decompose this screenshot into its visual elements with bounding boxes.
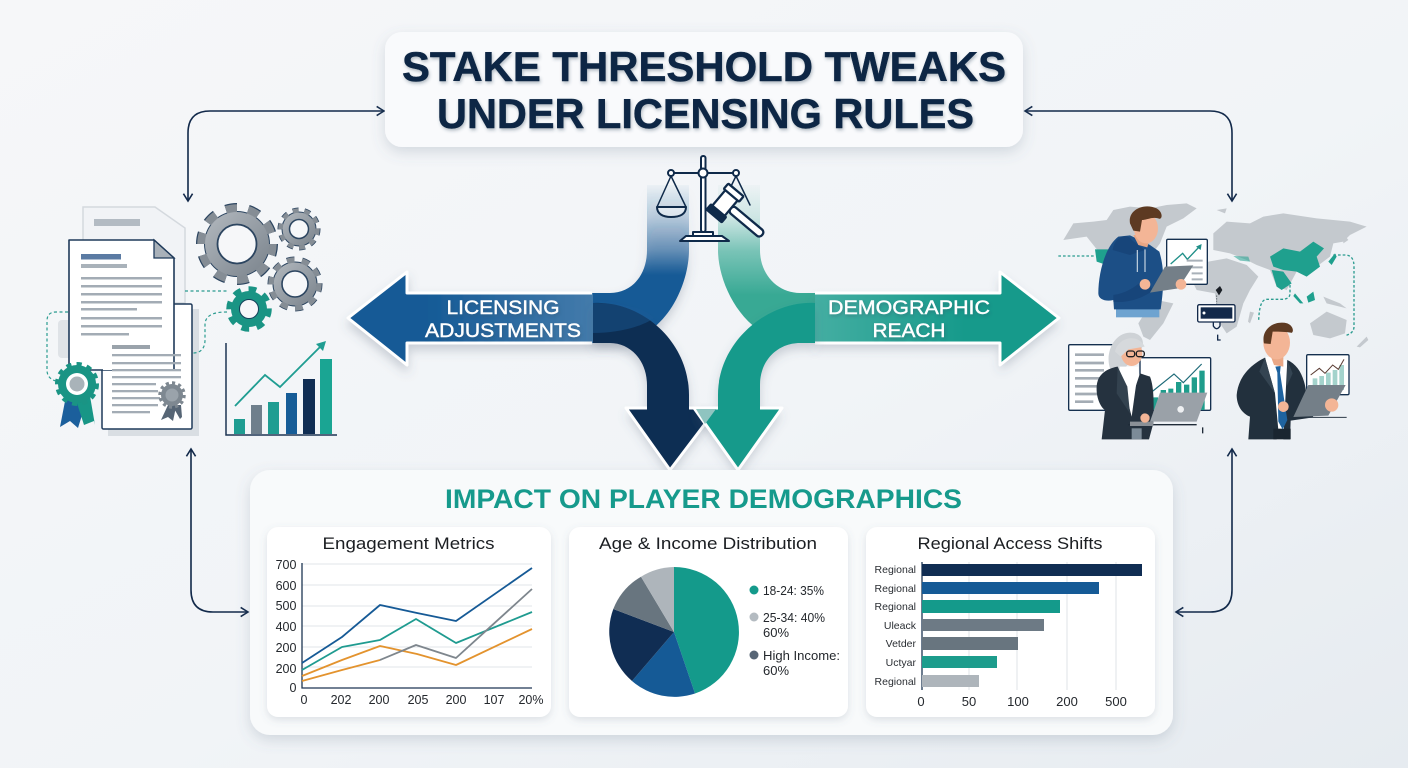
title: STAKE THRESHOLD TWEAKS <box>402 43 1006 90</box>
title panel <box>385 32 1023 147</box>
bar chart: 200 <box>1056 694 1078 709</box>
world map <box>1063 203 1368 347</box>
dashed map connectors <box>1058 255 1354 336</box>
pie chart <box>609 567 739 697</box>
chart title: Age & Income Distribution <box>599 534 817 553</box>
label: licensing adjustments: ADJUSTMENTS <box>425 320 581 342</box>
icon: teal gear <box>229 289 269 329</box>
bar chart: 0 <box>917 694 925 709</box>
legend <box>750 583 840 678</box>
icon: grey seal <box>160 383 184 421</box>
icon: scales of justice with gavel <box>657 156 773 248</box>
icon: side tab <box>58 320 78 358</box>
chart icon: growth bars with trend arrow <box>226 341 337 435</box>
card: engagement metrics line chart <box>267 527 551 717</box>
title: UNDER LICENSING RULES <box>437 90 974 137</box>
illustration: world map and three players <box>1058 203 1368 439</box>
line chart: 400 <box>276 620 296 634</box>
icon: background document <box>83 207 185 303</box>
bar chart: Regional <box>875 676 916 688</box>
heading: IMPACT ON PLAYER DEMOGRAPHICS <box>445 484 962 514</box>
line chart: 20% <box>518 693 544 707</box>
dashed connectors <box>47 291 227 382</box>
legend: 25-34: 40% <box>763 610 825 625</box>
icon: medium gear <box>271 260 319 308</box>
icon: main document <box>69 240 174 370</box>
title <box>402 43 1006 137</box>
icon: teal award seal <box>57 364 97 428</box>
line chart: 600 <box>276 579 296 593</box>
bar chart <box>875 562 1142 709</box>
bar chart: Uleack <box>884 620 917 632</box>
bar chart: 50 <box>962 694 976 709</box>
icon: small gear <box>280 210 318 248</box>
line chart: 200 <box>276 662 296 676</box>
connector arrow: documents to impact panel <box>191 449 248 612</box>
line chart <box>276 558 544 707</box>
chart title: Regional Access Shifts <box>918 534 1102 553</box>
bar chart: Vetder <box>886 638 917 650</box>
line chart: 0 <box>301 693 308 707</box>
line chart: 0 <box>290 681 297 695</box>
bar chart: Regional <box>875 583 916 595</box>
person: businessman with tablet <box>1237 323 1349 439</box>
panel: impact on player demographics <box>250 470 1173 735</box>
bar chart: Regional <box>875 564 916 576</box>
bar chart: 500 <box>1105 694 1127 709</box>
person: young man in hoodie with tablet <box>1098 206 1207 317</box>
label: demographic reach: DEMOGRAPHIC <box>828 297 990 319</box>
legend: High Income: <box>763 648 840 663</box>
card: regional access bar chart <box>866 527 1155 717</box>
illustration: licensing documents, gears and growth chart <box>47 207 337 436</box>
label: demographic reach <box>828 297 990 342</box>
icon: device marker <box>1198 286 1235 340</box>
label: licensing adjustments <box>425 297 581 342</box>
bar chart: Uctyar <box>886 657 916 669</box>
line chart: 700 <box>276 558 296 572</box>
legend: 60% <box>763 625 789 640</box>
legend: 60% <box>763 663 789 678</box>
line chart: 107 <box>484 693 504 707</box>
arrow: licensing adjustments, blue left branch <box>348 185 689 365</box>
line chart: 200 <box>369 693 389 707</box>
arrow: teal branch downward <box>694 303 815 470</box>
arrow: blue branch downward <box>593 303 717 470</box>
icon: second document text <box>103 345 181 413</box>
line chart: 202 <box>331 693 351 707</box>
icon: large gear <box>201 208 273 280</box>
bar chart: 100 <box>1007 694 1029 709</box>
bar chart: Regional <box>875 601 916 613</box>
legend: 18-24: 35% <box>763 583 824 598</box>
label: licensing adjustments: LICENSING <box>446 297 560 319</box>
connector arrow: people to impact panel <box>1176 449 1232 612</box>
line chart: 205 <box>408 693 428 707</box>
icon: second document <box>102 304 199 436</box>
chart title: Engagement Metrics <box>322 534 494 553</box>
label: demographic reach: REACH <box>872 320 946 342</box>
connector arrow: title to documents <box>188 111 384 201</box>
connector arrow: title to people <box>1025 111 1232 201</box>
line chart: 200 <box>446 693 466 707</box>
line chart: 200 <box>276 641 296 655</box>
card: age and income pie chart <box>569 527 848 717</box>
arrow: demographic reach, teal right branch <box>718 185 1059 365</box>
person: older woman with laptop <box>1069 333 1211 439</box>
line chart: 500 <box>276 599 296 613</box>
map highlight: teal countries <box>1095 242 1337 303</box>
